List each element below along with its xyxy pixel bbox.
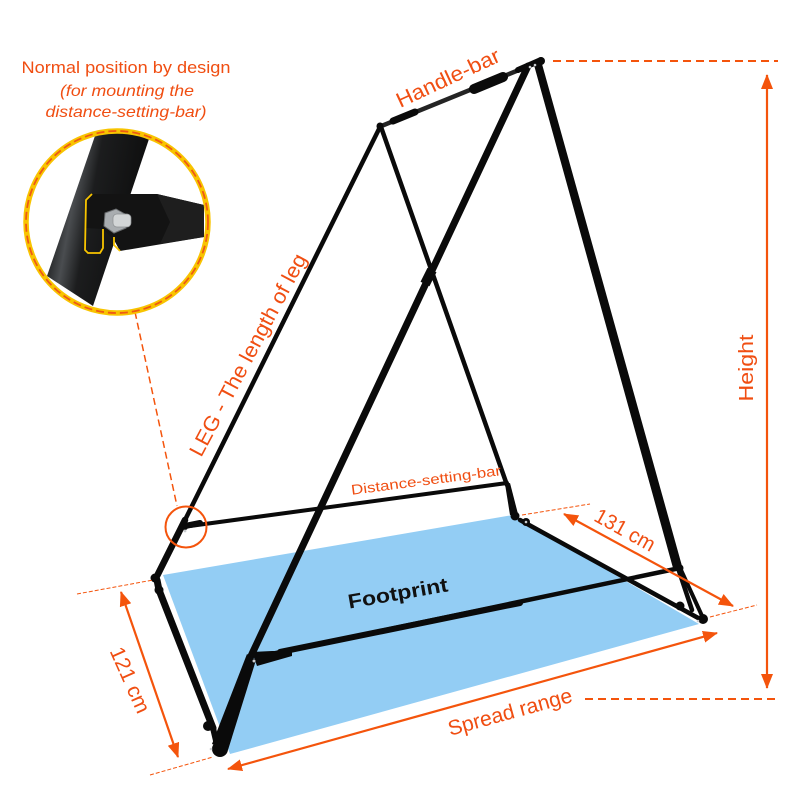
lens: yellow outlines	[85, 194, 120, 253]
footprint area	[163, 515, 699, 754]
arrow: 121 cm	[121, 592, 178, 757]
callout leader line	[135, 312, 177, 506]
label: leg length: LEG - The length of leg	[185, 250, 312, 460]
callout target ring	[166, 506, 206, 548]
left leg	[156, 127, 380, 578]
lens: tube	[47, 130, 152, 306]
callout heading: (for mounting the	[60, 83, 194, 100]
label: 131 cm: 131 cm	[590, 504, 659, 556]
distance-setting-bar upper	[185, 483, 507, 526]
dimension guide lines	[77, 61, 778, 775]
lens: bracket plate	[86, 194, 204, 251]
lens: dashed rim	[26, 131, 208, 313]
distance-setting-bar lower	[252, 568, 680, 666]
arrow: height	[766, 75, 768, 688]
frame joints	[150, 57, 708, 757]
frame	[156, 60, 703, 750]
left base bar	[157, 580, 217, 745]
frame bolts	[184, 64, 699, 750]
callout heading: Normal position by design	[22, 58, 230, 77]
arrow: spread range	[228, 633, 717, 769]
main front leg	[212, 66, 528, 750]
detail lens	[26, 130, 208, 313]
lens: bolt	[104, 209, 131, 233]
label: 121 cm: 121 cm	[105, 644, 154, 717]
lens: yellow rim	[26, 131, 208, 313]
label: handle-bar: Handle-bar	[393, 44, 504, 113]
callout heading: distance-setting-bar)	[46, 104, 206, 121]
right base bar	[520, 520, 700, 619]
label: height: Height	[736, 334, 758, 402]
label: distance-setting-bar: Distance-setting-bar	[350, 462, 502, 498]
label: spread range: Spread range	[445, 684, 575, 741]
right rear leg	[534, 64, 703, 618]
callout heading	[22, 58, 230, 121]
inner rear leg	[381, 127, 518, 515]
handle-bar	[379, 60, 541, 127]
footprint label: Footprint	[346, 574, 450, 614]
arrow: 131 cm	[564, 514, 733, 606]
